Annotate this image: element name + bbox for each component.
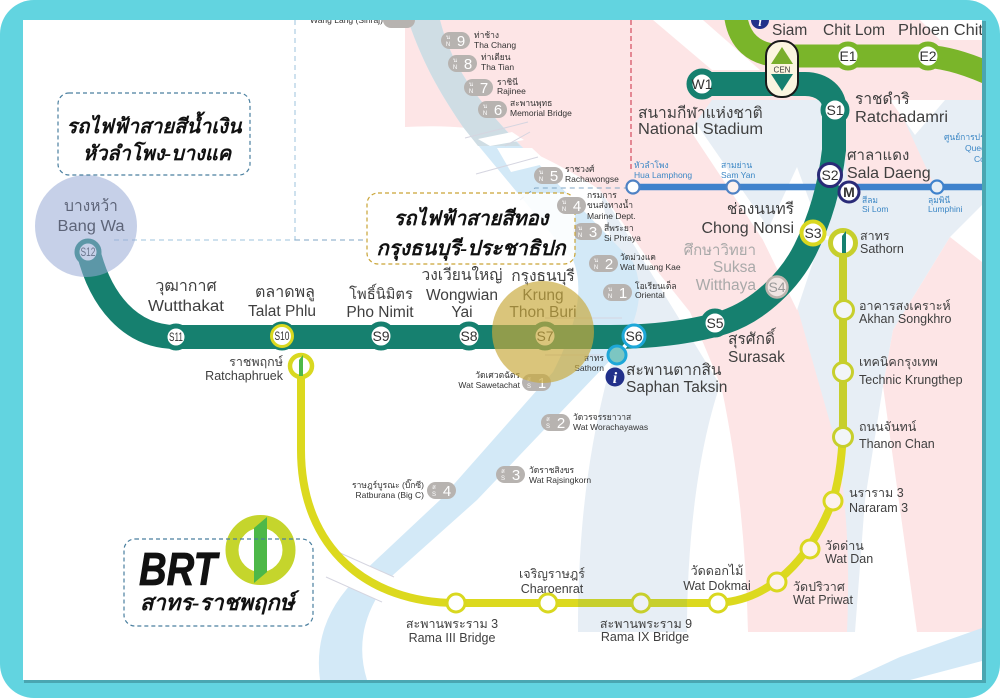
station: Rama III Bridge <box>406 594 498 645</box>
small pier labels: Chao Phraya express <box>310 12 681 500</box>
station: Charoenrat <box>519 567 585 612</box>
Bang Wa highlight circle <box>35 175 137 277</box>
station: S1 Ratchadamri: ราชดำริ <box>855 91 910 108</box>
label: Queen Sirikit centre: Queen <box>965 143 991 153</box>
callout: gold line <box>367 193 575 264</box>
station: S10 Talat Phlu: ตลาดพลู <box>255 284 315 302</box>
label: National Stadium <box>638 105 763 138</box>
pier S1: วัดเศวตฉัตร <box>475 370 520 380</box>
station: S5 Surasak: สุรศักดิ์ <box>728 327 777 349</box>
station: S10 Talat Phlu: S10 <box>274 329 290 343</box>
station: S2 Sala Daeng: M <box>843 184 855 200</box>
pier N2: N <box>594 265 598 271</box>
station: Wat Priwat: วัดปริวาศ <box>793 580 845 594</box>
callout: BRT: BRT <box>139 543 220 595</box>
station: Rama III Bridge: สะพานพระราม 3 <box>406 617 498 631</box>
station: S1 Ratchadamri: S1 <box>826 102 844 118</box>
station: S2 Sala Daeng: S2 <box>821 167 839 183</box>
station: W1 <box>690 72 714 96</box>
station: S10 Talat Phlu: Talat Phlu <box>248 303 316 320</box>
label: Queen Sirikit centre: ศูนย์การประชุม <box>944 132 1000 143</box>
pier N1: N <box>608 294 612 300</box>
pier S4: ส <box>432 484 436 491</box>
pier N3 <box>573 222 641 243</box>
label: Chong Nonsi <box>702 201 794 237</box>
pier N5: N <box>539 177 543 183</box>
station: Technic Krungthep: Technic Krungthep <box>859 373 963 387</box>
pier N3: 3 <box>589 224 597 241</box>
pier N9: ท่าช้าง <box>474 30 499 40</box>
station: BRT Sathorn: สาทร <box>860 229 890 243</box>
station: S11 Wutthakat: Wutthakat <box>148 298 225 315</box>
station: Wat Dan <box>801 539 873 566</box>
station: Si Lom: Si Lom <box>862 204 888 214</box>
icon: BRT logo <box>232 517 289 583</box>
pier N7: น <box>469 82 473 88</box>
pier N1: โอเรียนเต็ล <box>635 280 677 291</box>
pier S2: Wat Worachayawas <box>573 422 648 432</box>
label: Bang Wa: Bang Wa <box>58 218 125 235</box>
station: Rama IX Bridge: สะพานพระราม 9 <box>600 617 692 631</box>
pier N6: สะพานพุทธ <box>510 98 552 109</box>
station: Rama III Bridge: Rama III Bridge <box>409 631 495 645</box>
pier N10: Wang Lang (Siriraj) <box>310 15 383 25</box>
pier N8 <box>448 52 514 73</box>
station: Ratchaphruek <box>205 355 312 383</box>
station: Rama IX Bridge: Rama IX Bridge <box>601 630 689 644</box>
station: E1 <box>836 44 860 68</box>
station: E1: E1 <box>839 48 857 64</box>
callout: blue line: หัวลำโพง-บางแค <box>83 141 233 165</box>
pier N6: น <box>483 104 487 110</box>
CEN interchange: CEN <box>774 66 791 74</box>
pier N5: 5 <box>550 168 558 185</box>
pier N3: สี่พระยา <box>604 222 634 233</box>
station: S9 Pho Nimit: S9 <box>372 328 390 344</box>
station: Ratchaphruek: ราชพฤกษ์ <box>229 355 283 369</box>
pier N9: N <box>446 42 450 48</box>
pier S4: 4 <box>443 483 451 500</box>
label: Chit Lom: Chit Lom <box>823 22 885 39</box>
station: S6 Saphan Taksin: Sathorn <box>574 363 604 373</box>
background: pink behind Sala Daeng <box>846 100 932 184</box>
station: BRT Sathorn <box>830 229 904 256</box>
station: S7 Krung Thon Buri: Thon Buri <box>509 304 577 321</box>
pier S1: Wat Sawetachat <box>458 380 521 390</box>
pier S1: ส <box>527 376 531 383</box>
pier N6: Memorial Bridge <box>510 108 572 118</box>
label: Queen Sirikit centre: Co <box>974 154 985 164</box>
yellow BRT line <box>297 378 846 607</box>
station: Akhan Songkhro: Akhan Songkhro <box>859 312 951 326</box>
pier N4: 4 <box>573 198 581 215</box>
pier S2: 2 <box>557 415 565 432</box>
station: S9 Pho Nimit: Pho Nimit <box>346 304 414 321</box>
dark teal Silom line <box>88 84 834 337</box>
label: Chong Nonsi: ช่องนนทรี <box>727 201 794 218</box>
station: S9 Pho Nimit: โพธิ์นิมิตร <box>349 283 413 303</box>
CEN interchange <box>766 41 798 97</box>
label: National Stadium: National Stadium <box>638 121 763 138</box>
pier N5: น <box>539 170 543 176</box>
station: Technic Krungthep <box>834 355 963 387</box>
station: W1: W1 <box>692 76 713 92</box>
callout: BRT <box>124 539 313 626</box>
station: S8 Wongwian Yai <box>422 266 502 348</box>
station: S2 Sala Daeng: ศาลาแดง <box>847 147 909 164</box>
station: Thanon Chan <box>834 420 935 451</box>
background: white wedges <box>653 20 982 310</box>
pier N4: Marine Dept. <box>587 211 636 221</box>
pier N6: 6 <box>494 102 502 119</box>
station labels top <box>35 11 984 396</box>
station: S3 Sathorn: S3 <box>804 225 822 241</box>
pier S1 <box>458 370 551 392</box>
pier N4: น <box>562 200 566 206</box>
label: National Stadium: สนามกีฬาแห่งชาติ <box>638 105 763 122</box>
station: Nararam 3 <box>824 486 908 515</box>
pier N1: Oriental <box>635 290 665 300</box>
station: S11 Wutthakat: วุฒากาศ <box>155 278 217 296</box>
station: Rama IX Bridge <box>600 594 692 644</box>
label: Bang Wa: บางหว้า <box>64 198 118 215</box>
station: Sam Yan: Sam Yan <box>721 170 755 180</box>
label: Suksa Witthaya <box>684 242 756 294</box>
pier N7: ราชินี <box>497 77 518 87</box>
label: Suksa Witthaya: Witthaya <box>696 277 756 294</box>
station: Technic Krungthep: เทคนิคกรุงเทพ <box>859 355 938 370</box>
MRT stations <box>626 132 1000 214</box>
pier N2: 2 <box>605 256 613 273</box>
BRT stations <box>205 229 963 645</box>
callout: blue line: รถไฟฟ้าสายสีน้ำเงิน <box>66 111 243 138</box>
station: S8 Wongwian Yai: S8 <box>460 328 478 344</box>
station: S11 Wutthakat: S11 <box>169 330 183 344</box>
callout: blue line <box>58 93 250 175</box>
station: S8 Wongwian Yai: Yai <box>451 304 473 321</box>
dashed boundary lines <box>110 20 633 240</box>
station: Hua Lamphong <box>626 160 692 194</box>
station: S4: S4 <box>768 279 786 295</box>
station: S3 Sathorn <box>802 222 842 244</box>
pier S2: ส <box>546 416 550 423</box>
station: S2 Sala Daeng: Sala Daeng <box>847 165 931 182</box>
pier N4: ขนส่งทางน้ำ <box>587 199 633 210</box>
pier S3 <box>496 465 591 485</box>
station: Thanon Chan: Thanon Chan <box>859 437 935 451</box>
pier N3: Si Phraya <box>604 233 641 243</box>
label: Saphan Taksin: สะพานตากสิน <box>626 362 722 379</box>
pier S4: S <box>432 492 436 498</box>
blue MRT line <box>633 184 990 190</box>
station: Hua Lamphong: หัวลำโพง <box>634 160 669 170</box>
pier N7: Rajinee <box>497 86 526 96</box>
callout: gold line: กรุงธนบุรี-ประชาธิปก <box>376 237 567 261</box>
station: Wat Priwat: Wat Priwat <box>793 593 853 607</box>
station: S7 Krung Thon Buri: กรุงธนบุรี <box>511 268 575 286</box>
pier N4 <box>557 190 636 221</box>
pier S3: Wat Rajsingkorn <box>529 475 591 485</box>
gold highlight circle <box>492 281 594 383</box>
yellow line: olive sections over grey district <box>578 243 843 603</box>
pier N7: N <box>469 89 473 95</box>
pier S2: วัดวรจรรยาวาส <box>573 412 632 422</box>
station: S7 Krung Thon Buri: Krung <box>522 287 564 304</box>
pier S4: Ratburana (Big C) <box>355 490 424 500</box>
station: S6 Saphan Taksin: สาทร <box>584 353 604 363</box>
green Sukhumvit line <box>735 10 990 74</box>
icon: info Saphan Taksin <box>606 368 624 387</box>
label: Suksa Witthaya: Suksa <box>713 259 756 276</box>
pier N7: 7 <box>480 80 488 97</box>
pier N5 <box>534 164 619 185</box>
label: Phloen Chit: Phloen Chit <box>898 22 984 39</box>
pier S2: S <box>546 424 550 430</box>
station: S2 Sala Daeng <box>818 147 931 202</box>
station: Si Lom <box>862 196 888 212</box>
station: S9 Pho Nimit <box>346 283 414 348</box>
pier N8: ท่าเตียน <box>481 52 511 62</box>
background: river lower right <box>850 628 982 680</box>
station: S11 Wutthakat <box>148 278 225 348</box>
station: Hua Lamphong: Hua Lamphong <box>634 170 692 180</box>
pier S4: ราษฎร์บูรณะ (บิ๊กซี) <box>352 478 424 491</box>
pier N1: 1 <box>619 285 627 302</box>
pier N5: Rachawongse <box>565 174 619 184</box>
station: S4 <box>766 276 788 298</box>
pier S3: 3 <box>512 467 520 484</box>
background: pale grey districts <box>578 100 982 632</box>
pier S1: 1 <box>538 375 546 392</box>
station: Wat Dokmai: วัดดอกไม้ <box>691 564 743 578</box>
pier S3: ส <box>501 468 505 475</box>
pier S3: วัดราชสิงขร <box>529 465 575 475</box>
station: S7 Krung Thon Buri <box>509 268 577 348</box>
callout: BRT: สาทร-ราชพฤกษ์ <box>140 590 300 615</box>
station: Si Lom: สีลม <box>862 195 878 205</box>
station: Wat Priwat <box>768 573 853 607</box>
pier S2 <box>541 412 648 432</box>
label: Suksa Witthaya: ศึกษาวิทยา <box>684 242 756 259</box>
station: S12 Bang Wa <box>77 241 99 263</box>
bridge strokes <box>326 122 622 602</box>
label: Siam: Siam <box>772 22 807 39</box>
station: BRT Sathorn: Sathorn <box>860 242 904 256</box>
pier N3: N <box>578 233 582 239</box>
pier N10 <box>310 20 415 28</box>
station: Lumphini: ลุมพินี <box>928 195 950 206</box>
station: Charoenrat: Charoenrat <box>521 582 584 596</box>
station: Wat Dokmai: Wat Dokmai <box>683 579 751 593</box>
station: Charoenrat: เจริญราษฎร์ <box>519 567 585 581</box>
station: Lumphini: Lumphini <box>928 204 963 214</box>
station: Wat Dokmai <box>683 564 751 612</box>
pier N1: น <box>608 287 612 293</box>
station: Wat Dan: วัดด่าน <box>825 539 864 553</box>
pier N8: น <box>453 58 457 64</box>
icon: info Siam <box>751 20 769 29</box>
station: Akhan Songkhro <box>834 299 951 326</box>
pier N3: น <box>578 226 582 232</box>
label: Chong Nonsi: Chong Nonsi <box>702 220 794 237</box>
pier N6: N <box>483 111 487 117</box>
station: Wat Dan: Wat Dan <box>825 552 873 566</box>
station: S6 Saphan Taksin <box>574 325 645 373</box>
station: S1 Ratchadamri <box>823 91 948 126</box>
pier N2: น <box>594 258 598 264</box>
callout: gold line: รถไฟฟ้าสายสีทอง <box>394 206 551 230</box>
pier N2: วัดม่วงแค <box>620 252 656 262</box>
pier N6 <box>478 100 572 118</box>
pier N5: ราชวงศ์ <box>565 164 595 174</box>
background: pink districts <box>405 20 982 632</box>
pier N8: 8 <box>464 56 472 73</box>
station: S12 Bang Wa: S12 <box>80 245 96 259</box>
icon: info Saphan Taksin: i <box>613 370 618 387</box>
background: river <box>319 20 639 680</box>
station: Akhan Songkhro: อาคารสงเคราะห์ <box>859 299 951 313</box>
pier N2 <box>589 252 681 273</box>
station: E2 <box>916 44 940 68</box>
station: S8 Wongwian Yai: Wongwian <box>426 287 498 304</box>
label: Saphan Taksin <box>626 362 727 396</box>
station: S5 Surasak: Surasak <box>728 349 785 366</box>
pier N7 <box>464 77 526 97</box>
station: S5 Surasak <box>703 311 785 366</box>
label: Saphan Taksin: Saphan Taksin <box>626 379 727 396</box>
station: Nararam 3: Nararam 3 <box>849 501 908 515</box>
pier N9: 9 <box>457 33 465 50</box>
station: Thanon Chan: ถนนจันทน์ <box>859 420 917 434</box>
station: S7 Krung Thon Buri: S7 <box>536 328 554 344</box>
station: S1 Ratchadamri: Ratchadamri <box>855 109 948 126</box>
pier N9 <box>441 30 516 50</box>
station: S8 Wongwian Yai: วงเวียนใหญ่ <box>422 266 502 284</box>
station: Lumphini <box>928 180 963 214</box>
pier N9: น <box>446 35 450 41</box>
station: Ratchaphruek: Ratchaphruek <box>205 369 284 383</box>
station: E2: E2 <box>919 48 937 64</box>
pier N4: N <box>562 207 566 213</box>
pier N1 <box>603 280 677 302</box>
pier N9: Tha Chang <box>474 40 516 50</box>
icon: info Siam: i <box>758 14 762 29</box>
pier N2: Wat Muang Kae <box>620 262 681 272</box>
pier N4: กรมการ <box>587 190 617 200</box>
pier N8: N <box>453 65 457 71</box>
station: Sam Yan: สามย่าน <box>721 160 752 170</box>
pier S4 <box>352 478 456 500</box>
background: river through pink <box>408 20 520 146</box>
station: Sam Yan <box>721 160 755 194</box>
station: S6 Saphan Taksin: S6 <box>625 328 643 344</box>
pier S1: S <box>527 384 531 390</box>
station: S5 Surasak: S5 <box>706 315 724 331</box>
station: S10 Talat Phlu <box>248 284 316 348</box>
label: Queen Sirikit centre <box>944 132 982 162</box>
pier S3: S <box>501 476 505 482</box>
background: bridge gaps in river <box>349 132 541 599</box>
station: Nararam 3: นราราม 3 <box>849 486 904 500</box>
pier N8: Tha Tian <box>481 62 514 72</box>
label: Bang Wa <box>58 198 125 235</box>
